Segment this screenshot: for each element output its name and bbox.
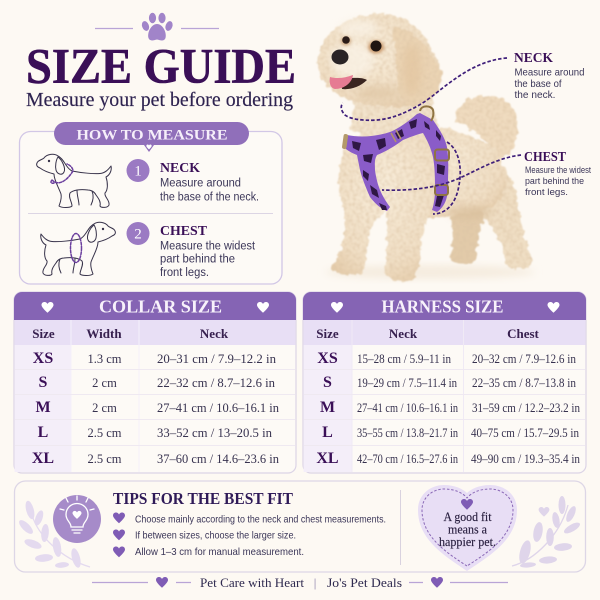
paw icon with side rules: [95, 13, 219, 40]
front legs and chest: [331, 121, 449, 281]
footer: Jo's Pet Deals: [327, 575, 402, 590]
harness size labels: M: [320, 399, 335, 416]
collar size labels: XL: [32, 450, 54, 467]
title: SIZE GUIDE: [26, 38, 296, 94]
callout: chest: CHEST: [524, 150, 567, 165]
tips list: If between sizes, choose the larger size.: [135, 530, 296, 542]
collar widths: 2 cm: [92, 401, 117, 415]
collar widths: 1.3 cm: [87, 352, 122, 366]
icon: light bulb with heart: [53, 495, 101, 543]
footer: [92, 575, 508, 590]
collar widths: 2.5 cm: [87, 452, 122, 466]
panel: how to measure: [20, 122, 282, 284]
harness size labels: XL: [316, 450, 339, 467]
harness column headings: Chest: [507, 326, 540, 341]
collar table header: [14, 292, 296, 320]
text: neck step: Measure around: [160, 178, 241, 190]
collar widths: 2.5 cm: [87, 426, 122, 440]
body: [395, 125, 506, 220]
fur shading: [330, 19, 492, 218]
head: [318, 13, 442, 107]
text: neck step: NECK: [160, 161, 200, 176]
footer: Pet Care with Heart: [200, 575, 304, 590]
harness neck ranges: 19–29 cm / 7.5–11.4 in: [357, 375, 457, 390]
collar widths: [87, 352, 122, 466]
numbered badge 2: [126, 222, 150, 245]
numbered badge 1: 1: [134, 164, 142, 180]
heading pill: how to measure: HOW TO MEASURE: [76, 128, 228, 144]
subtitle: Measure your pet before ordering: [26, 89, 293, 111]
panel: tips for the best fit: [14, 481, 586, 572]
harness table header: [303, 292, 586, 320]
dog illustration wearing harness: [318, 13, 535, 281]
collar widths: 2 cm: [92, 376, 117, 390]
numbered badge 2: 2: [134, 226, 142, 242]
harness: [342, 106, 449, 212]
collar neck ranges: 33–52 cm / 13–20.5 in: [157, 425, 272, 440]
harness neck ranges: 42–70 cm / 16.5–27.6 in: [357, 451, 458, 466]
collar neck ranges: 27–41 cm / 10.6–16.1 in: [157, 400, 279, 415]
collar column headings: Size: [32, 326, 55, 341]
collar neck ranges: [157, 351, 279, 466]
icon: dog with neck loop: [37, 154, 111, 208]
heading pill: how to measure: [54, 122, 249, 152]
text: chest step: Measure the widest: [160, 240, 256, 252]
tips list: Allow 1–3 cm for manual measurement.: [135, 547, 304, 558]
callout: chest: [524, 150, 591, 197]
collar column headings: Neck: [200, 326, 229, 341]
footer: |: [314, 575, 316, 590]
collar column headings: Width: [86, 326, 122, 341]
collar neck ranges: 37–60 cm / 14.6–23.6 in: [157, 451, 279, 466]
harness chest ranges: 49–90 cm / 19.3–35.4 in: [471, 451, 580, 466]
harness chest ranges: [471, 351, 580, 466]
callout: neck: the base of: [514, 78, 562, 90]
mouth and tongue: [330, 75, 367, 89]
text: chest step: part behind the: [160, 254, 235, 266]
leaves left: [17, 500, 90, 569]
text: neck step: the base of the neck.: [160, 192, 259, 204]
harness chest ranges: 31–59 cm / 12.2–23.2 in: [472, 400, 580, 415]
collar size labels: S: [39, 374, 48, 391]
harness chest ranges: 22–35 cm / 8.7–13.8 in: [472, 375, 576, 390]
harness column headings: Neck: [389, 326, 418, 341]
callout: neck: [514, 51, 585, 101]
collar size labels: XS: [33, 350, 53, 367]
collar column headings: [15, 320, 295, 472]
harness size labels: S: [323, 374, 332, 391]
collar neck ranges: 22–32 cm / 8.7–12.6 in: [157, 375, 275, 390]
ear: [392, 28, 441, 104]
tips heading: TIPS FOR THE BEST FIT: [113, 489, 294, 508]
text: neck step: [160, 161, 259, 204]
callout: neck: Measure around: [514, 66, 585, 78]
text: chest step: [160, 224, 256, 279]
harness column headings: Size: [316, 326, 339, 341]
harness size labels: L: [322, 424, 333, 441]
collar size labels: L: [38, 424, 48, 441]
neck: [350, 95, 438, 139]
callout: chest: part behind the: [525, 176, 584, 186]
eyes: [341, 36, 384, 54]
leaves right: [512, 496, 582, 568]
collar table header: COLLAR SIZE: [99, 296, 222, 316]
tips list: [113, 512, 386, 558]
panel: collar size table: [14, 292, 296, 473]
tail: [455, 95, 518, 158]
nose: [332, 50, 348, 64]
rear legs: [450, 205, 488, 264]
heart callout: means a: [448, 522, 487, 536]
collar size labels: [32, 350, 54, 467]
text: chest step: CHEST: [160, 224, 208, 239]
heart callout: [418, 485, 517, 571]
icon: dog with chest loop: [41, 222, 115, 276]
harness neck ranges: 27–41 cm / 10.6–16.1 in: [357, 400, 458, 415]
harness neck ranges: [357, 351, 458, 466]
chest measure line: [382, 142, 521, 214]
callout: neck: NECK: [514, 51, 553, 66]
collar neck ranges: 20–31 cm / 7.9–12.2 in: [157, 351, 276, 366]
heart callout: A good fit: [444, 509, 492, 524]
neck measure line: [341, 58, 507, 120]
collar size labels: M: [35, 399, 51, 416]
harness table header: HARNESS SIZE: [382, 296, 504, 316]
harness size labels: [316, 350, 339, 467]
harness chest ranges: 20–32 cm / 7.9–12.6 in: [472, 351, 576, 366]
tips list: Choose mainly according to the neck and chest measurements.: [135, 514, 386, 526]
harness column headings: [304, 320, 585, 472]
harness neck ranges: 35–55 cm / 13.8–21.7 in: [357, 425, 458, 440]
callout: chest: front legs.: [525, 187, 568, 197]
text: chest step: front legs.: [160, 267, 209, 279]
numbered badge 1: [126, 159, 150, 182]
harness neck ranges: 15–28 cm / 5.9–11 in: [357, 351, 451, 366]
heart callout: happier pet.: [439, 534, 496, 549]
callout: neck: the neck.: [514, 89, 556, 101]
harness size labels: XS: [317, 350, 338, 367]
panel: harness size table: [303, 292, 586, 473]
harness chest ranges: 40–75 cm / 15.7–29.5 in: [471, 425, 579, 440]
